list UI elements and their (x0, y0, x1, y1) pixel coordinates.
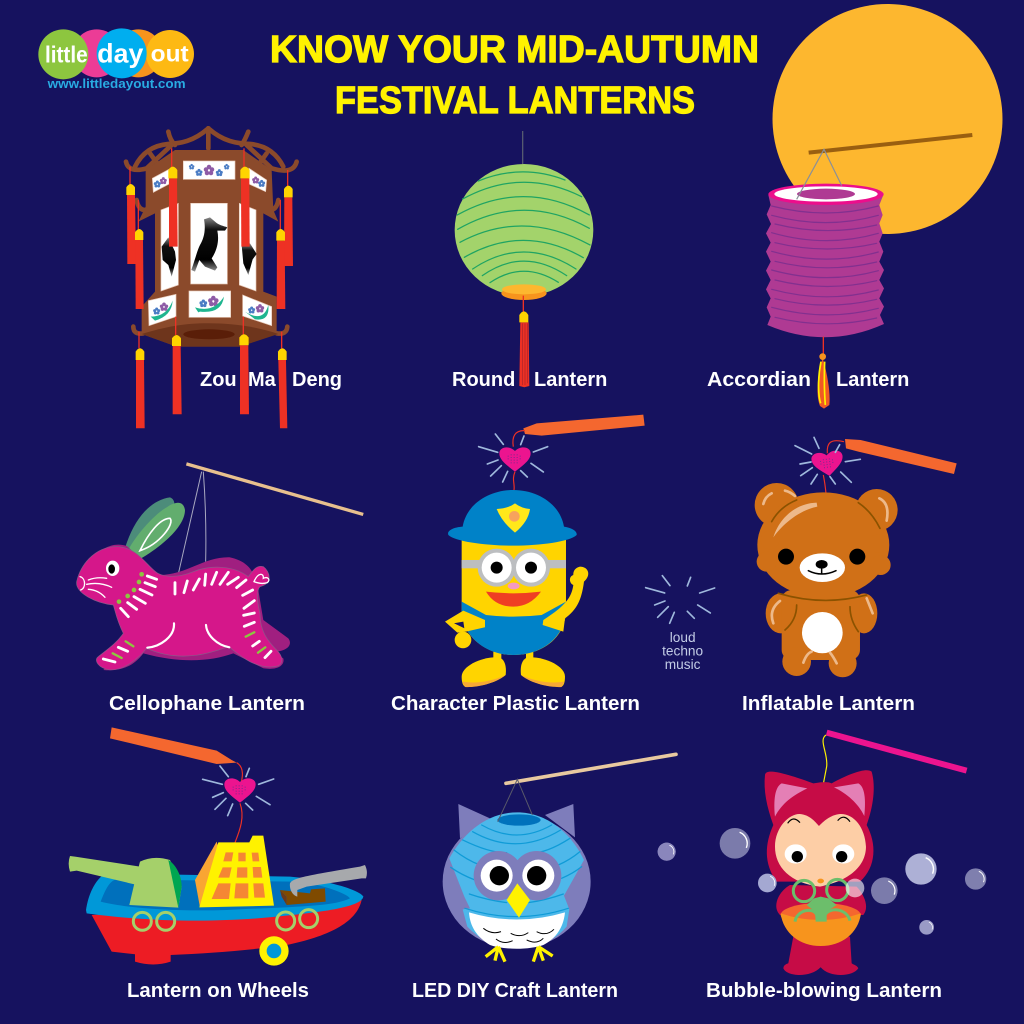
logo: Little Day Out: day (97, 38, 143, 68)
label: Bubble-blowing Lantern: Bubble-blowing Lantern (706, 980, 942, 1002)
label: Round Lantern: Lantern (534, 369, 607, 391)
bubble near owl (658, 843, 676, 861)
logo: Little Day Out: little (45, 41, 88, 67)
lantern: bubble-blowing fox (658, 733, 986, 975)
roof frame (126, 128, 297, 334)
label: Inflatable Lantern: Inflatable Lantern (742, 693, 915, 715)
logo: Little Day Out: out (151, 41, 189, 67)
label: Cellophane Lantern: Cellophane Lantern (109, 693, 305, 715)
lantern: boat on wheels (69, 727, 367, 966)
title (270, 29, 759, 122)
moon (772, 4, 1002, 234)
lantern: round (455, 131, 593, 387)
label: Round Lantern: Round (452, 369, 515, 391)
label: Lantern on Wheels: Lantern on Wheels (127, 980, 309, 1002)
flowers (151, 164, 268, 321)
lantern: cellophane rabbit (77, 464, 362, 670)
label: Character Plastic Lantern: Character Plastic Lantern (391, 693, 640, 715)
title: KNOW YOUR MID-AUTUMN (270, 29, 759, 71)
bubbles (658, 828, 986, 935)
lantern: Zou Ma Deng (126, 128, 297, 428)
lantern: character plastic (minion) (445, 415, 645, 687)
logo: Little Day Out (38, 28, 194, 91)
label: Accordian Lantern: Accordian (707, 369, 811, 391)
label: Accordian Lantern: Lantern (836, 369, 909, 391)
running horse pictures (191, 217, 227, 272)
sound rays and caption: loud techno music: techno (662, 644, 704, 659)
logo: Little Day Out: www.littledayout.com (47, 77, 186, 91)
label: LED DIY Craft Lantern: LED DIY Craft Lantern (412, 980, 618, 1002)
sound rays and caption: loud techno music (646, 576, 715, 672)
sound rays and caption: loud techno music: loud (670, 630, 696, 645)
label: Zou Ma Deng: Deng (292, 369, 342, 391)
label: Zou Ma Deng: Ma (248, 369, 277, 391)
lantern: accordion (766, 135, 972, 409)
lantern: inflatable bear (755, 437, 957, 677)
label: Zou Ma Deng: Zou (200, 369, 237, 391)
title: FESTIVAL LANTERNS (335, 80, 695, 122)
sound rays and caption: loud techno music: music (665, 657, 701, 672)
panels (148, 161, 272, 326)
lantern: LED DIY owl (443, 754, 676, 962)
tassels (130, 148, 288, 348)
